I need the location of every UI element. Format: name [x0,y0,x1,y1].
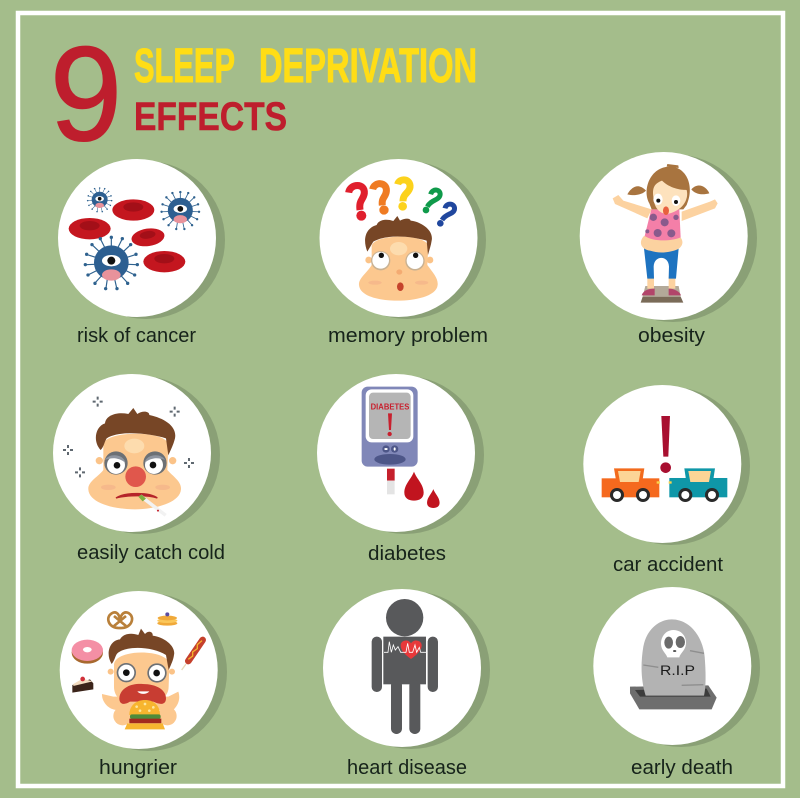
label: heart disease [347,757,467,779]
panel: easily catch cold [53,374,225,564]
panel: heart disease [323,589,490,779]
icon: glucose meter and blood drops [362,387,440,508]
panel: hungrier [60,591,227,779]
number 9: 9 [50,20,122,169]
panel: memory problem [320,159,488,347]
icon: tombstone [630,619,717,709]
label: obesity [638,325,705,347]
icon: tombstone: R.I.P [660,662,695,678]
panel: diabetes [317,374,484,565]
title [50,20,477,169]
label: hungrier [99,757,177,779]
icon: girl on a scale [613,164,718,303]
panel: early death [593,587,760,779]
icon: glucose meter and blood drops: DIABETES [371,402,410,411]
panel: risk of cancer [58,159,225,347]
label: diabetes [368,543,446,565]
icon: blood cells and viruses [69,187,200,290]
panel: obesity [580,152,757,347]
panel: car accident [583,385,750,576]
heading: effects: EFFECTS [134,95,287,139]
label: easily catch cold [77,542,225,564]
label: car accident [613,554,723,576]
label: risk of cancer [77,325,196,347]
icon: two cars with exclamation mark [602,416,727,502]
icon: sick face with thermometer [63,397,194,517]
heading: deprivation: DEPRIVATION [259,40,477,93]
label: memory problem [328,325,488,347]
icon: hungry man with burger and snacks [72,612,203,729]
icon: confused head with question marks [349,180,455,301]
label: early death [631,757,733,779]
heading: sleep: SLEEP [134,40,235,93]
icon: body figure with heart [372,599,438,734]
